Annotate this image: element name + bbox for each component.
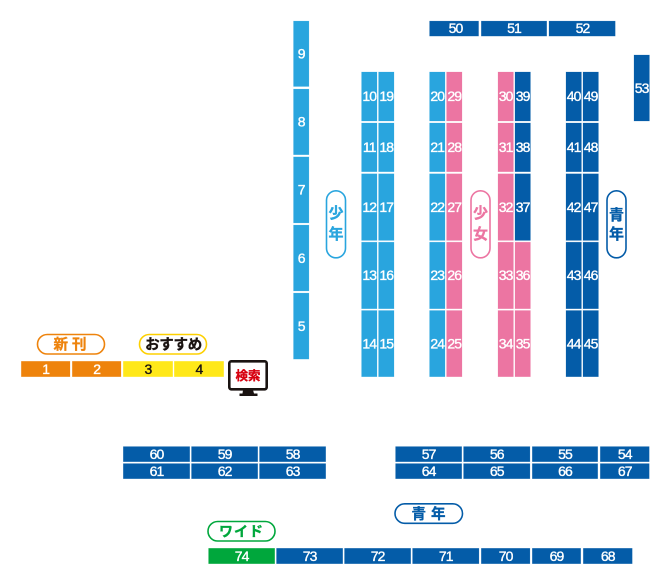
label: shojo: [471, 191, 490, 258]
shelf 59: [191, 446, 258, 462]
shelf 67: [600, 463, 650, 479]
shelf 1: 1: [42, 361, 50, 377]
shelf 33: [498, 242, 514, 309]
shelf 28: [446, 123, 462, 172]
shelf 42: 42: [567, 199, 582, 215]
shelf 1: [21, 361, 70, 377]
shelf 36: [515, 242, 531, 309]
shelf 52: [549, 20, 616, 36]
label: wide: [208, 522, 275, 541]
shelf 46: [583, 242, 599, 309]
shelf 4: [174, 361, 224, 377]
shelf 56: [463, 446, 530, 462]
shelf 50: [429, 20, 479, 36]
shelf 68: 68: [601, 548, 616, 564]
shelf 59: 59: [218, 446, 233, 462]
icon: search monitor: [229, 361, 267, 396]
shelf 10: [361, 72, 377, 121]
shelf 43: [566, 242, 582, 309]
shelf 55: [532, 446, 598, 462]
shelf 72: 72: [371, 548, 386, 564]
shelf 48: [583, 123, 599, 172]
shelf 48: 48: [584, 139, 599, 155]
shelf 21: [429, 123, 445, 172]
shelf 63: [259, 463, 326, 479]
label: seinen vertical: [607, 191, 626, 258]
shelf 73: [276, 548, 343, 564]
shelf 65: 65: [490, 463, 505, 479]
shelf 63: 63: [286, 463, 301, 479]
shelf 42: [566, 174, 582, 241]
shelf 47: 47: [584, 199, 599, 215]
shelf 6: [293, 225, 309, 291]
shelf 64: 64: [422, 463, 437, 479]
shelf 19: [378, 72, 394, 121]
shelf 61: 61: [150, 463, 164, 479]
shelf 12: [361, 174, 377, 241]
shelf 57: [395, 446, 462, 462]
shelf 67: 67: [618, 463, 633, 479]
shelf 35: 35: [516, 335, 531, 351]
shelf 45: [583, 310, 599, 377]
shelf 58: [259, 446, 326, 462]
label: seinen vertical: 年: [609, 225, 624, 243]
shelf 16: 16: [379, 267, 394, 283]
shelf 71: [412, 548, 479, 564]
shelf 46: 46: [584, 267, 599, 283]
shelf 16: [378, 242, 394, 309]
shelf group: back row 64-67: [395, 463, 650, 479]
label: new releases: [38, 334, 104, 354]
shelf 33: 33: [499, 267, 514, 283]
shelf 34: [498, 310, 514, 377]
shelf 18: 18: [379, 139, 394, 155]
shelf 44: 44: [567, 335, 582, 351]
shelf 21: 21: [430, 139, 445, 155]
shelf 65: [463, 463, 530, 479]
shelf 7: [293, 157, 309, 223]
shelf group: 20-29: [429, 72, 462, 377]
shelf 35: [515, 310, 531, 377]
shelf group: 1-4: [21, 361, 224, 377]
shelf 49: [583, 72, 599, 121]
shelf 53: 53: [635, 80, 650, 96]
icon: search monitor: 検索: [235, 368, 261, 383]
shelf 56: 56: [490, 446, 505, 462]
shelf 55: 55: [558, 446, 573, 462]
shelf 32: [498, 174, 514, 241]
shelf 27: 27: [447, 199, 462, 215]
shelf group: back row 60-58: [123, 446, 326, 462]
shelf 52: 52: [576, 20, 590, 36]
shelf 31: 31: [499, 139, 514, 155]
shelf 29: [446, 72, 462, 121]
shelf 26: [446, 242, 462, 309]
shelf group: 30-39: [498, 72, 531, 377]
shelf 71: 71: [439, 548, 454, 564]
shelf 24: 24: [430, 335, 445, 351]
shelf 47: [583, 174, 599, 241]
shelf 40: [566, 72, 582, 121]
shelf group: back row 61-63: [123, 463, 326, 479]
shelf 29: 29: [447, 88, 462, 104]
shelf 66: [532, 463, 598, 479]
shelf 17: [378, 174, 394, 241]
shelf group: top row 50-52: [429, 20, 616, 36]
shelf 62: 62: [218, 463, 233, 479]
shelf 15: 15: [379, 335, 394, 351]
shelf 74: [208, 548, 275, 564]
label: shonen: 少: [328, 205, 344, 222]
label: shonen: 年: [328, 225, 344, 243]
shelf 31: [498, 123, 514, 172]
label: recommended: [140, 334, 206, 354]
shelf 13: 13: [362, 267, 377, 283]
shelf 11: [361, 123, 377, 172]
shelf group: bottom row 74-68: [208, 548, 633, 564]
shelf 70: [481, 548, 530, 564]
shelf 14: 14: [362, 335, 377, 351]
shelf 64: [395, 463, 462, 479]
shelf 45: 45: [584, 335, 599, 351]
shelf 8: 8: [298, 114, 306, 130]
shelf 38: 38: [516, 139, 531, 155]
shelf 73: 73: [303, 548, 318, 564]
shelf 41: [566, 123, 582, 172]
shelf 28: 28: [447, 139, 462, 155]
shelf 15: [378, 310, 394, 377]
shelf 54: 54: [618, 446, 633, 462]
shelf 69: 69: [550, 548, 564, 564]
label: wide: ワイド: [219, 524, 264, 540]
label: shonen: [326, 191, 346, 258]
shelf 12: 12: [362, 199, 377, 215]
shelf 39: [515, 72, 531, 121]
shelf 37: 37: [516, 199, 531, 215]
shelf 69: [532, 548, 581, 564]
shelf 25: [446, 310, 462, 377]
shelf 3: 3: [145, 361, 153, 377]
shelf 43: 43: [567, 267, 582, 283]
shelf 70: 70: [499, 548, 514, 564]
shelf 74: 74: [235, 548, 250, 564]
label: new releases: 新刊: [54, 336, 90, 354]
shelf 51: [481, 20, 547, 36]
shelf 4: 4: [196, 361, 204, 377]
label: recommended: おすすめ: [145, 336, 202, 354]
shelf 9: 9: [298, 46, 306, 62]
label: seinen horizontal: [395, 504, 462, 523]
shelf 66: 66: [558, 463, 573, 479]
shelf 3: [123, 361, 173, 377]
shelf 17: 17: [379, 199, 394, 215]
shelf group: shonen double column 10-19: [361, 72, 394, 377]
shelf 72: [344, 548, 411, 564]
shelf 2: 2: [93, 361, 101, 377]
shelf 23: 23: [430, 267, 445, 283]
shelf 57: 57: [422, 446, 437, 462]
shelf 60: [123, 446, 190, 462]
shelf 20: 20: [430, 88, 445, 104]
shelf 22: 22: [430, 199, 445, 215]
shelf 41: 41: [567, 139, 582, 155]
shelf 34: 34: [499, 335, 514, 351]
shelf 22: [429, 174, 445, 241]
shelf 50: 50: [449, 20, 463, 36]
shelf 23: [429, 242, 445, 309]
shelf 13: [361, 242, 377, 309]
shelf 26: 26: [447, 267, 462, 283]
shelf 39: 39: [516, 88, 531, 104]
shelf 68: [583, 548, 632, 564]
shelf 54: [600, 446, 650, 462]
label: shojo: 女: [473, 226, 488, 243]
shelf 24: [429, 310, 445, 377]
shelf 19: 19: [379, 88, 394, 104]
shelf 44: [566, 310, 582, 377]
shelf 36: 36: [516, 267, 531, 283]
label: shojo: 少: [473, 205, 488, 222]
shelf 49: 49: [584, 88, 599, 104]
label: seinen vertical: 青: [609, 207, 624, 224]
shelf 7: 7: [298, 182, 306, 198]
shelf group: shonen single column 5-9: [293, 21, 309, 359]
shelf 5: [293, 293, 309, 359]
shelf 61: [123, 463, 190, 479]
shelf 30: 30: [499, 88, 514, 104]
shelf group: back row 57-54: [395, 446, 650, 462]
shelf 10: 10: [362, 88, 377, 104]
shelf 20: [429, 72, 445, 121]
shelf 25: 25: [447, 335, 462, 351]
shelf 9: [293, 21, 309, 87]
shelf 14: [361, 310, 377, 377]
shelf 30: [498, 72, 514, 121]
shelf 32: 32: [499, 199, 514, 215]
shelf 18: [378, 123, 394, 172]
shelf 51: 51: [507, 20, 522, 36]
shelf 11: 11: [363, 139, 377, 155]
shelf 60: 60: [150, 446, 164, 462]
shelf 40: 40: [567, 88, 582, 104]
shelf 38: [515, 123, 531, 172]
shelf 53: [634, 55, 650, 121]
shelf 58: 58: [286, 446, 301, 462]
shelf 8: [293, 89, 309, 155]
label: seinen horizontal: 青年: [412, 505, 450, 523]
shelf 62: [191, 463, 258, 479]
shelf 27: [446, 174, 462, 241]
shelf 6: 6: [298, 250, 306, 266]
shelf 37: [515, 174, 531, 241]
shelf 5: 5: [298, 318, 306, 334]
shelf group: 40-49: [566, 72, 599, 377]
shelf 2: [72, 361, 121, 377]
